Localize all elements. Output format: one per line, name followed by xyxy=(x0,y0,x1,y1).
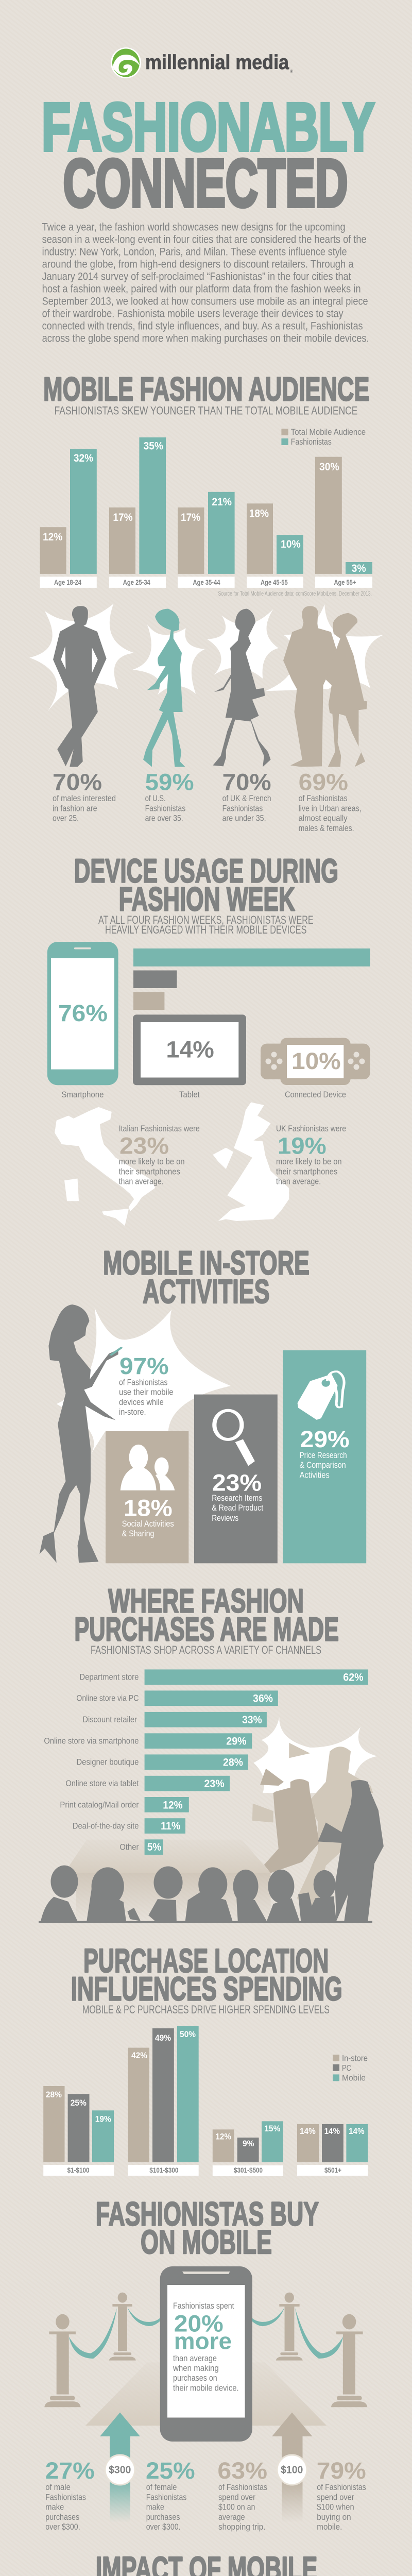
stats: purchases over $300 and $100: $100 on an xyxy=(218,2502,255,2512)
horizontal bar chart: purchase channels: 11% xyxy=(161,1820,181,1832)
horizontal bar chart: purchase channels: Online store via smartphone xyxy=(44,1736,139,1746)
stat: Italian fashionistas: 23% xyxy=(119,1132,169,1159)
horizontal bar chart: purchase channels: 23% xyxy=(204,1778,225,1790)
stat: 97% in-store: in-store. xyxy=(119,1407,146,1417)
bar chart: age audience: 3% xyxy=(352,563,366,574)
icon: tablet 14% xyxy=(133,1014,246,1085)
stats: purchases over $300 and $100: over $300. xyxy=(45,2522,80,2532)
intro paragraph xyxy=(42,222,369,345)
arrow: $100 xyxy=(272,2412,312,2522)
bar chart: age audience: 32% xyxy=(74,452,93,464)
stat: UK fashionistas: UK Fashionistas were xyxy=(276,1124,346,1133)
heading: fashionistas buy: ON MOBILE xyxy=(141,2223,272,2261)
bar chart: age audience: Age 55+ xyxy=(334,578,356,586)
bar chart: age audience: 17% xyxy=(113,512,133,523)
stat: UK fashionistas: more likely to be on xyxy=(276,1157,342,1166)
stats: purchases over $300 and $100 xyxy=(45,2458,366,2532)
stats: purchases over $300 and $100: make xyxy=(45,2502,64,2512)
horizontal bar chart: purchase channels: 29% xyxy=(226,1735,247,1747)
icon: phone with 20% more: purchases on xyxy=(173,2373,217,2383)
intro paragraph: industry: New York, London, Paris, and Milan. These events influence style xyxy=(42,246,347,258)
stats: purchases over $300 and $100: Fashionistas xyxy=(45,2492,86,2502)
icon: phone with 20% more: more xyxy=(174,2328,232,2354)
horizontal bar chart: purchase channels: Department store xyxy=(79,1672,139,1682)
stat: Italian fashionistas: their smartphones xyxy=(119,1166,180,1176)
horizontal bar chart: purchase channels xyxy=(44,1669,368,1855)
icon: phone with 20% more: their mobile device. xyxy=(173,2383,239,2393)
stats: purchases over $300 and $100: average xyxy=(218,2512,245,2522)
figure stats: of males interested xyxy=(53,793,116,803)
panel: price research 29% xyxy=(283,1350,366,1563)
bar chart: spending by location: 12% xyxy=(215,2132,231,2141)
stats: purchases over $300 and $100: shopping trip. xyxy=(218,2522,265,2532)
icon: phone with 20% more xyxy=(160,2266,252,2442)
figure stats: 70% xyxy=(222,769,271,795)
panel: social activities 18%: Social Activities xyxy=(122,1519,174,1529)
icon: smartphone 76%: 76% xyxy=(58,1000,108,1026)
panel: social activities 18% xyxy=(106,1431,188,1563)
icon: phone with 20% more: 20% xyxy=(174,2310,224,2336)
stat: Italian fashionistas xyxy=(119,1124,200,1187)
heading: mobile in-store: ACTIVITIES xyxy=(143,1273,270,1310)
bar chart: age audience: Age 18-24 xyxy=(54,578,81,586)
stats: purchases over $300 and $100: of Fashionistas xyxy=(317,2482,366,2492)
stats: purchases over $300 and $100: $100 when xyxy=(317,2502,354,2512)
bar chart: age audience: 10% xyxy=(281,538,301,550)
bar chart: spending by location: 15% xyxy=(264,2124,280,2133)
bar chart: age audience: 30% xyxy=(319,461,339,473)
bar chart: spending by location: 50% xyxy=(180,2029,196,2039)
heading: purchase location xyxy=(71,1942,342,2016)
stats: purchases over $300 and $100: of Fashionistas xyxy=(218,2482,267,2492)
heading: device usage xyxy=(74,852,338,936)
stat: UK fashionistas: 19% xyxy=(278,1132,327,1159)
figure stats: 70% xyxy=(53,769,102,795)
panel: research items 23%: & Read Product xyxy=(212,1503,263,1513)
panel: research items 23% xyxy=(194,1395,278,1563)
panel: price research 29%: 29% xyxy=(300,1426,350,1452)
stats: purchases over $300 and $100: purchases xyxy=(45,2512,79,2522)
bar chart: spending by location: 42% xyxy=(131,2050,147,2060)
stat: Italian fashionistas: more likely to be on xyxy=(119,1157,185,1166)
panel: price research 29%: Activities xyxy=(300,1470,330,1480)
stats: purchases over $300 and $100: 27% xyxy=(45,2458,95,2484)
horizontal bar chart: purchase channels: 36% xyxy=(253,1693,273,1704)
panel: price research 29%: Price Research xyxy=(300,1450,347,1460)
silhouettes: four fashionista figures with starbursts xyxy=(29,604,384,767)
panel: research items 23%: 23% xyxy=(212,1469,262,1496)
horizontal bar chart: purchase channels: Deal-of-the-day site xyxy=(73,1821,139,1831)
bar chart: spending by location: 14% xyxy=(300,2126,316,2136)
device labels: Tablet xyxy=(179,1090,200,1099)
horizontal bar chart: purchase channels: Designer boutique xyxy=(76,1757,139,1767)
bar chart: age audience: 18% xyxy=(249,508,269,520)
icon: tablet 14%: 14% xyxy=(166,1037,214,1063)
map: Italy xyxy=(55,1107,155,1226)
legend: audience chart xyxy=(281,427,366,447)
arrow: $300: $300 xyxy=(109,2465,131,2476)
logo: millennial media xyxy=(111,47,293,78)
bar chart: spending by location: 14% xyxy=(349,2126,365,2136)
bar chart: spending by location: 19% xyxy=(95,2114,111,2124)
figure stats: Fashionistas xyxy=(222,803,263,813)
figure stats: of U.S. xyxy=(145,793,166,803)
figure stats: in fashion are xyxy=(53,803,97,813)
bar chart: age audience: 35% xyxy=(144,440,163,452)
bar chart: spending by location: 9% xyxy=(243,2139,254,2148)
panel: social activities 18%: & Sharing xyxy=(122,1529,154,1538)
heading: mobile in-store: MOBILE IN-STORE xyxy=(103,1244,310,1282)
horizontal bar chart: purchase channels: 12% xyxy=(163,1799,183,1811)
intro paragraph: across the globe spend more when making purchases on their mobile devices. xyxy=(42,333,369,345)
figure stats: are under 35. xyxy=(222,814,266,823)
stat: 97% in-store xyxy=(119,1353,174,1417)
intro paragraph: season in a week-long event in four cities that are considered the hearts of the xyxy=(42,234,367,246)
figure stats: are over 35. xyxy=(145,814,183,823)
arrow: $300 xyxy=(100,2412,140,2522)
stats: purchases over $300 and $100: over $300. xyxy=(146,2522,180,2532)
icon: phone with 20% more: than average xyxy=(173,2353,217,2363)
horizontal bar chart: purchase channels: 33% xyxy=(242,1714,262,1726)
horizontal bar chart: purchase channels: 5% xyxy=(147,1841,162,1853)
stats: purchases over $300 and $100: Fashionistas xyxy=(146,2492,186,2502)
figure stats: Fashionistas xyxy=(145,803,185,813)
heading: fashionistas buy xyxy=(96,2195,319,2261)
bar chart: age audience: Age 45-55 xyxy=(261,578,288,586)
stats: purchases over $300 and $100: spend over xyxy=(317,2492,354,2502)
stat: Italian fashionistas: than average. xyxy=(119,1177,164,1187)
intro paragraph: around the globe, from high-end designers to discount retailers. Through a xyxy=(42,259,354,270)
legend: audience chart: Fashionistas xyxy=(291,437,332,447)
stat: UK fashionistas: their smartphones xyxy=(276,1166,337,1176)
device share bars xyxy=(133,948,370,1010)
figure stats: 59% xyxy=(145,769,194,795)
figure stats xyxy=(53,769,362,833)
stat: 97% in-store: of Fashionistas xyxy=(119,1378,167,1387)
legend: spending chart: In-store xyxy=(342,2054,368,2063)
horizontal bar chart: purchase channels: Online store via tablet xyxy=(65,1778,139,1788)
logo: millennial media: ® xyxy=(290,69,293,74)
figure stats: of Fashionistas xyxy=(299,793,348,803)
stats: purchases over $300 and $100: buying on xyxy=(317,2512,351,2522)
device labels xyxy=(61,1090,346,1099)
heading: device usage: HEAVILY ENGAGED WITH THEIR MOBILE DEVICES xyxy=(105,923,306,936)
legend: audience chart: Total Mobile Audience xyxy=(291,427,366,437)
bar chart: age audience xyxy=(40,437,372,588)
stat: 97% in-store: 97% xyxy=(119,1353,169,1379)
stat: UK fashionistas xyxy=(276,1124,346,1187)
figure stats: over 25. xyxy=(53,814,79,823)
stat: 97% in-store: devices while xyxy=(119,1397,164,1407)
icon: smartphone 76% xyxy=(47,942,118,1085)
bar chart: spending by location: 49% xyxy=(155,2033,171,2043)
bar chart: age audience: Age 35-44 xyxy=(193,578,220,586)
figure stats: of UK & French xyxy=(222,793,271,803)
stats: purchases over $300 and $100: spend over xyxy=(218,2492,255,2502)
horizontal bar chart: purchase channels: 28% xyxy=(223,1756,243,1768)
title xyxy=(42,89,374,221)
intro paragraph: host a fashion week, paired with our platform data from the fashion weeks in xyxy=(42,283,361,295)
icon: connected device 10%: 10% xyxy=(291,1048,341,1074)
heading: device usage: AT ALL FOUR FASHION WEEKS, FASHIONISTAS WERE xyxy=(98,913,314,926)
legend: spending chart: PC xyxy=(342,2063,351,2073)
device labels: Smartphone xyxy=(61,1090,104,1099)
bar chart: age audience: 12% xyxy=(43,531,63,543)
intro paragraph: January 2014 survey of self-proclaimed “Fashionistas” in the four cities that xyxy=(42,271,351,283)
panel: social activities 18%: 18% xyxy=(124,1495,173,1521)
horizontal bar chart: purchase channels: Other xyxy=(119,1842,139,1852)
illustration: crowd with megaphones and spotlight xyxy=(39,1717,384,1923)
figure stats: 69% xyxy=(299,769,348,795)
panel: research items 23%: Research Items xyxy=(212,1493,262,1503)
stats: purchases over $300 and $100: of male xyxy=(45,2482,71,2492)
bar chart: spending by location: $1-$100 xyxy=(67,2166,90,2174)
horizontal bar chart: purchase channels: Discount retailer xyxy=(82,1715,137,1724)
stats: purchases over $300 and $100: of female xyxy=(146,2482,177,2492)
stats: purchases over $300 and $100: make xyxy=(146,2502,164,2512)
figure stats: live in Urban areas, xyxy=(299,803,362,813)
panel: price research 29%: & Comparison xyxy=(300,1460,346,1470)
bar chart: spending by location: 28% xyxy=(46,2090,62,2099)
heading: where fashion purchases xyxy=(74,1582,339,1656)
figure stats: males & females. xyxy=(299,823,354,833)
intro paragraph: Twice a year, the fashion world showcases new designs for the upcoming xyxy=(42,222,346,233)
device labels: Connected Device xyxy=(285,1090,346,1099)
horizontal bar chart: purchase channels: 62% xyxy=(343,1672,364,1684)
horizontal bar chart: purchase channels: Print catalog/Mail order xyxy=(60,1800,139,1809)
heading: where fashion purchases: FASHIONISTAS SHOP ACROSS A VARIETY OF CHANNELS xyxy=(91,1643,321,1656)
illustration: velvet ropes and stanchions xyxy=(44,2293,367,2426)
bar chart: age audience: 21% xyxy=(212,496,232,508)
bar chart: age audience: 17% xyxy=(181,512,201,523)
illustration: woman with phone and starburst xyxy=(40,1304,231,1563)
map: United Kingdom xyxy=(213,1103,289,1221)
arrow: $100: $100 xyxy=(281,2465,303,2476)
heading: mobile in-store xyxy=(103,1244,310,1310)
legend: spending chart: Mobile xyxy=(342,2073,366,2083)
stat: 97% in-store: use their mobile xyxy=(119,1387,174,1397)
heading: where fashion purchases: WHERE FASHION xyxy=(108,1582,304,1620)
stats: purchases over $300 and $100: 63% xyxy=(217,2458,267,2484)
intro paragraph: September 2013, we looked at how consumers use mobile as an integral piece xyxy=(42,296,368,308)
heading: device usage: FASHION WEEK xyxy=(119,880,295,918)
intro paragraph: connected with trends, find style influences, and buy. As a result, Fashionistas xyxy=(42,320,363,332)
icon: connected device 10% xyxy=(261,1038,370,1085)
stat: UK fashionistas: than average. xyxy=(276,1177,321,1187)
logo: millennial media: millennial media xyxy=(145,52,289,74)
panel: research items 23%: Reviews xyxy=(212,1513,238,1523)
stat: Italian fashionistas: Italian Fashionistas were xyxy=(119,1124,200,1133)
figure stats: almost equally xyxy=(299,814,348,823)
bar chart: spending by location xyxy=(43,2026,368,2176)
stats: purchases over $300 and $100: 79% xyxy=(317,2458,366,2484)
bar chart: age audience: Age 25-34 xyxy=(123,578,150,586)
bar chart: spending by location: 25% xyxy=(71,2098,87,2108)
heading: purchase location: MOBILE & PC PURCHASES DRIVE HIGHER SPENDING LEVELS xyxy=(82,2003,330,2016)
bar chart: spending by location: 14% xyxy=(324,2126,340,2136)
legend: spending chart xyxy=(333,2054,368,2083)
bar chart: spending by location: $501+ xyxy=(324,2166,341,2174)
horizontal bar chart: purchase channels: Online store via PC xyxy=(76,1693,139,1703)
stats: purchases over $300 and $100: mobile. xyxy=(317,2522,342,2532)
icon: phone with 20% more: Fashionistas spent xyxy=(173,2301,234,2311)
bar chart: spending by location: $301-$500 xyxy=(234,2166,263,2174)
heading: fashionistas buy: FASHIONISTAS BUY xyxy=(96,2195,319,2233)
stats: purchases over $300 and $100: 25% xyxy=(146,2458,195,2484)
stats: purchases over $300 and $100: purchases xyxy=(146,2512,180,2522)
bar chart: spending by location: $101-$300 xyxy=(149,2166,179,2174)
intro paragraph: of their wardrobe. Fashionista mobile users leverage their devices to stay xyxy=(42,308,344,320)
icon: phone with 20% more: when making xyxy=(173,2363,219,2373)
